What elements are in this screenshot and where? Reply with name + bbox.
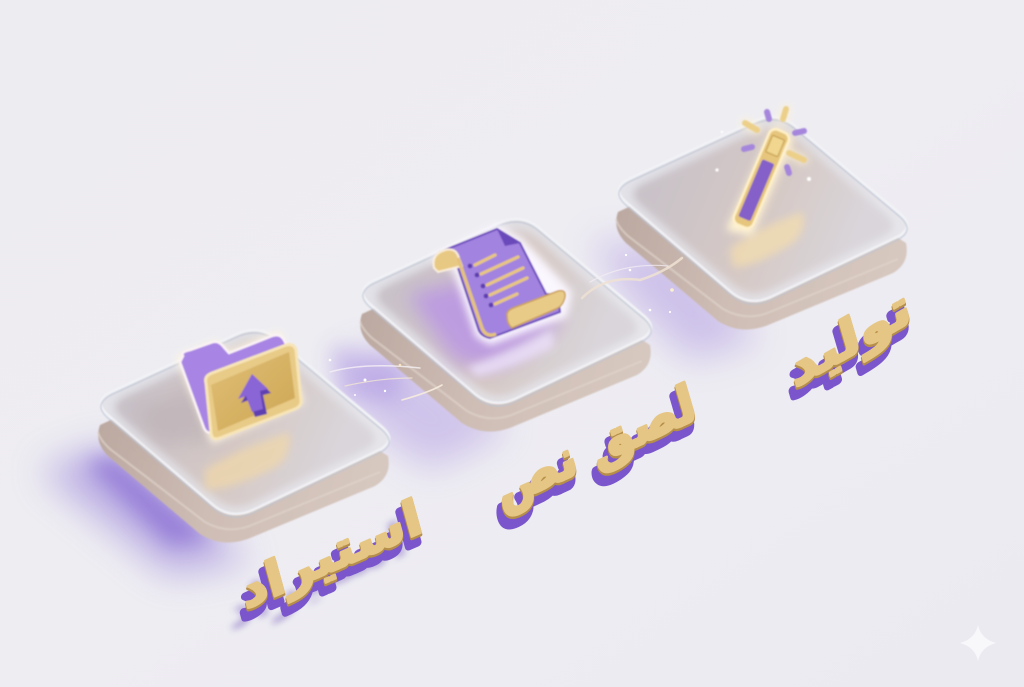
panel 2: paste text platform (360, 219, 651, 432)
glass plate (363, 219, 651, 406)
base slab (360, 249, 651, 432)
label: import: استيراد (233, 490, 428, 622)
label: paste text: لصق نص (488, 375, 702, 522)
floor shadows (40, 240, 760, 575)
bottom roll (507, 291, 565, 328)
panel 1: import platform (98, 330, 389, 543)
sparks (744, 109, 804, 173)
scroll glow (430, 224, 572, 345)
label: generate: توليد (778, 287, 914, 410)
purple glow reflection (407, 274, 562, 368)
folder front (206, 345, 301, 439)
panel 3: generate platform (616, 117, 907, 330)
glass plate (101, 330, 389, 517)
wand body (731, 127, 791, 230)
wand reflection (730, 212, 804, 267)
bullets (468, 264, 493, 307)
left edge (458, 258, 496, 335)
icon: magic wand (715, 109, 811, 236)
label: generate: توليد (781, 277, 917, 400)
icon: document scroll (430, 224, 572, 345)
arrow: energy beams from panel 1 to panel 2 (329, 359, 442, 400)
label: import: استيراد (218, 510, 413, 642)
frosted core (115, 341, 375, 507)
text lines (475, 255, 527, 304)
corner fold (497, 229, 520, 246)
icon: folder with upload arrow (176, 331, 304, 444)
label: paste text: لصق نص (488, 373, 702, 520)
label: generate: توليد (781, 279, 917, 402)
wand tip (766, 135, 785, 157)
folder back (180, 335, 290, 433)
folder glow (176, 331, 304, 444)
upload arrow (238, 374, 271, 417)
wand purple core (738, 159, 774, 221)
label: import: استيراد (230, 498, 425, 630)
frosted core (633, 128, 893, 294)
icon: corner sparkle (960, 625, 996, 661)
label: import: استيراد (233, 488, 428, 620)
top curl (433, 249, 462, 272)
glass plate (619, 117, 907, 304)
wand glow (726, 125, 794, 236)
base slab (616, 147, 907, 330)
purple sheet (438, 229, 560, 338)
label: paste text: لصق نص (485, 383, 699, 530)
folder reflection (205, 432, 290, 490)
base slab (98, 360, 389, 543)
arrow: energy beams from panel 2 to panel 3 (582, 254, 682, 313)
frosted core (377, 230, 637, 396)
